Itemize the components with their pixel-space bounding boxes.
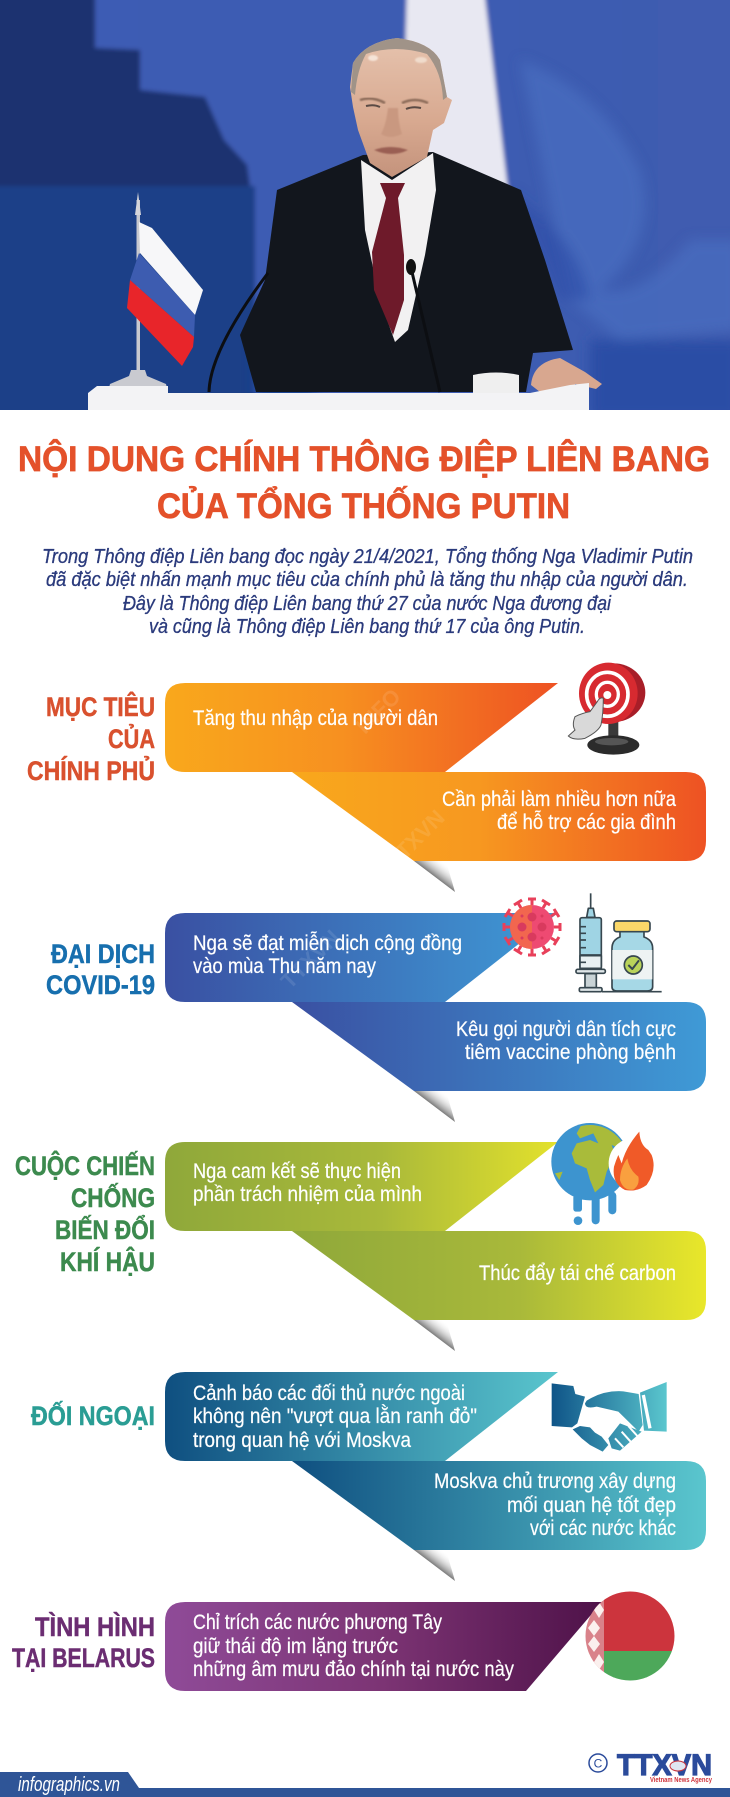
microphones: [209, 259, 440, 392]
panel: good relations: [292, 1461, 706, 1581]
podium: [88, 383, 589, 410]
panel: warn rivals: [165, 1372, 558, 1461]
title: [18, 439, 710, 526]
head: [350, 38, 452, 177]
panel: good relations: mối quan hệ tốt đẹp: [507, 1494, 676, 1517]
icon: syringe and vaccine bottle: [576, 893, 662, 992]
label: mục tiêu của chính phủ: [27, 691, 155, 786]
panel: criticism of the west: [165, 1602, 602, 1691]
title: NỘI DUNG CHÍNH THÔNG ĐIỆP LIÊN BANG: [18, 439, 710, 479]
intro text: [42, 546, 693, 638]
label: đối ngoại: ĐỐI NGOẠI: [31, 1399, 155, 1431]
panel: support families: Cần phải làm nhiều hơn nữa: [442, 788, 676, 811]
panel: russia's commitment: Nga cam kết sẽ thực hiện: [193, 1160, 401, 1183]
section 5: belarus: [12, 1590, 676, 1691]
section 1: government goals: [27, 663, 706, 892]
panel: good relations: với các nước khác: [530, 1517, 676, 1540]
icon: handshake: [552, 1382, 667, 1452]
cup: [473, 372, 519, 393]
panel: support families: để hỗ trợ các gia đình: [497, 811, 676, 834]
panel: herd immunity: vào mùa Thu năm nay: [193, 955, 376, 978]
panel: criticism of the west: những âm mưu đảo chính tại nước này: [193, 1658, 514, 1681]
photo: Putin speaking at a podium: [0, 0, 730, 421]
panel: herd immunity: [165, 913, 558, 1002]
panel: support families: [292, 772, 706, 892]
panel: good relations: Moskva chủ trương xây dựng: [434, 1470, 676, 1493]
panel: russia's commitment: phần trách nhiệm của mình: [193, 1183, 422, 1206]
tie: [372, 183, 405, 335]
panel: russia's commitment: [165, 1142, 558, 1231]
panel: criticism of the west: Chỉ trích các nước phương Tây: [193, 1611, 442, 1634]
label: tình hình tại belarus: [12, 1611, 155, 1673]
panel: support families: TTXVN: [381, 805, 450, 874]
footer bar with website: infographics.vn: [18, 1774, 120, 1796]
label: cuộc chiến chống biến đổi khí hậu: CHỐNG: [71, 1181, 155, 1213]
panel: warn rivals: Cảnh báo các đối thủ nước ngoài: [193, 1382, 465, 1405]
panel: call for vaccination: Kêu gọi người dân tích cực: [456, 1018, 676, 1041]
panel: raise incomes: Tăng thu nhập của người dân: [193, 707, 438, 730]
section 4: foreign relations: [31, 1372, 706, 1581]
title: CỦA TỔNG THỐNG PUTIN: [157, 486, 570, 526]
panel: warn rivals: không nên "vượt qua lằn ranh đỏ": [193, 1405, 477, 1428]
icon: virus: [504, 899, 560, 955]
panel: herd immunity: TTXVN: [276, 925, 345, 994]
panel: call for vaccination: tiêm vaccine phòng bệnh: [465, 1041, 676, 1064]
panel: warn rivals: trong quan hệ với Moskva: [193, 1429, 411, 1452]
section 3: climate: [15, 1115, 706, 1351]
intro text: đã đặc biệt nhấn mạnh mục tiêu của chính phủ là tăng thu nhập của người dân.: [46, 569, 688, 591]
footer bar with website: [0, 1772, 730, 1797]
label: tình hình tại belarus: TẠI BELARUS: [12, 1643, 155, 1673]
label: mục tiêu của chính phủ: CHÍNH PHỦ: [27, 754, 155, 786]
label: đại dịch covid-19: COVID-19: [46, 970, 155, 1000]
panel: call for vaccination: [292, 1002, 706, 1122]
shirt and collar: [361, 153, 436, 342]
icon: belarus flag: [585, 1590, 676, 1683]
panel: criticism of the west: giữ thái độ im lặng trước: [193, 1635, 398, 1658]
icon: melting globe with flame: [551, 1123, 654, 1225]
suit: [240, 152, 573, 392]
logo: TTXVN: Vietnam News Agency: [650, 1777, 712, 1784]
logo: TTXVN: TTXVN: [617, 1749, 712, 1782]
label: mục tiêu của chính phủ: MỤC TIÊU: [46, 691, 155, 722]
label: cuộc chiến chống biến đổi khí hậu: KHÍ HẬU: [60, 1246, 155, 1277]
label: mục tiêu của chính phủ: CỦA: [108, 722, 155, 754]
intro text: và cũng là Thông điệp Liên bang thứ 17 của ông Putin.: [149, 616, 585, 638]
panel: raise incomes: INFO: [351, 684, 406, 739]
logo: TTXVN: C: [594, 1756, 603, 1770]
panel: carbon recycling: Thúc đẩy tái chế carbon: [479, 1262, 676, 1285]
flag: [108, 192, 203, 392]
intro text: Đây là Thông điệp Liên bang thứ 27 của nước Nga đương đại: [123, 593, 611, 615]
icon: target with hand: [568, 663, 645, 755]
panel: herd immunity: Nga sẽ đạt miễn dịch cộng đồng: [193, 932, 462, 955]
hand: [531, 358, 602, 392]
label: cuộc chiến chống biến đổi khí hậu: CUỘC CHIẾN: [15, 1150, 155, 1181]
label: cuộc chiến chống biến đổi khí hậu: BIẾN ĐỔI: [55, 1214, 155, 1245]
label: đại dịch covid-19: ĐẠI DỊCH: [51, 939, 155, 969]
label: đại dịch covid-19: [46, 939, 155, 1000]
panel: raise incomes: [165, 683, 558, 772]
label: tình hình tại belarus: TÌNH HÌNH: [35, 1611, 155, 1642]
panel: carbon recycling: [292, 1231, 706, 1351]
section 2: covid: [46, 893, 706, 1122]
label: cuộc chiến chống biến đổi khí hậu: [15, 1150, 155, 1277]
